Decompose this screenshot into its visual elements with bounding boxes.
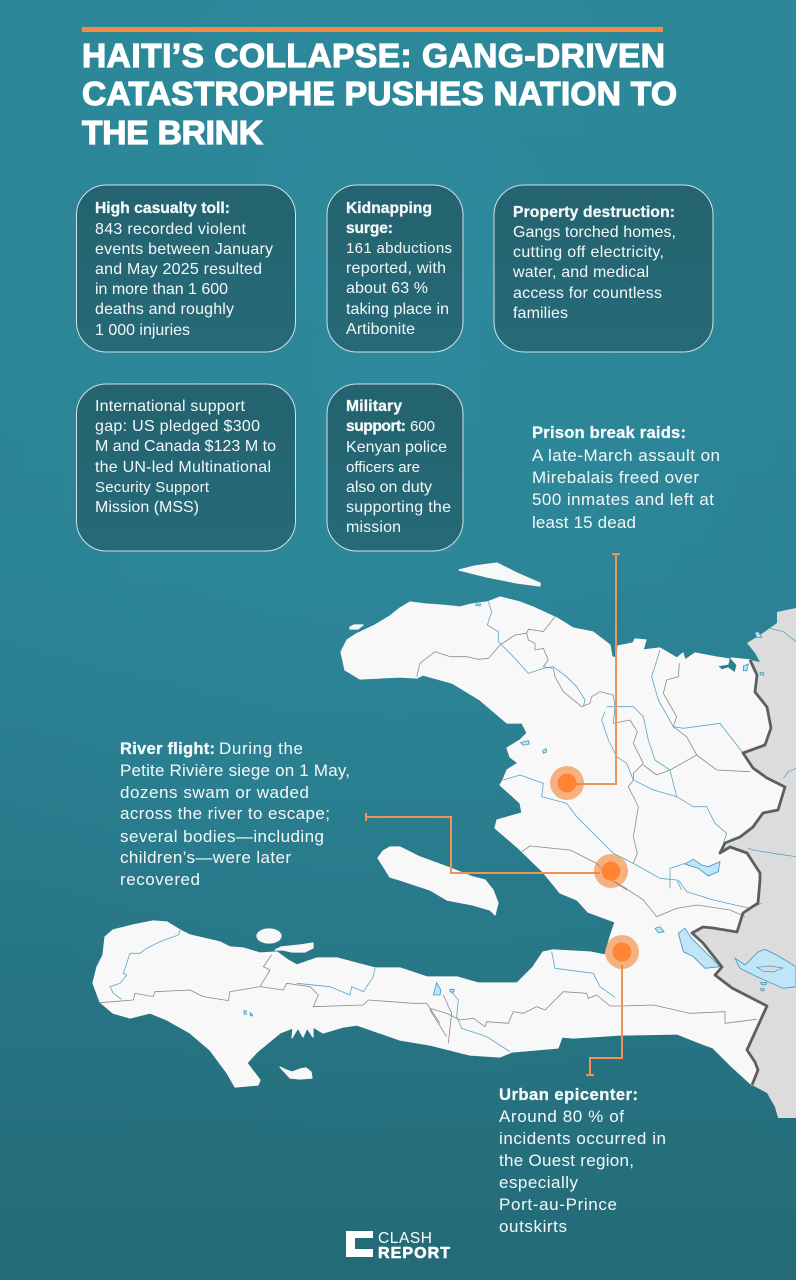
land: Haiti mainland bbox=[93, 597, 785, 1087]
callout: prison break raids: Mirebalais freed over bbox=[532, 468, 699, 487]
callout: urban epicenter: Port-au-Prince bbox=[499, 1195, 617, 1214]
panel: kidnapping surge: surge: bbox=[346, 220, 393, 237]
panel: high casualty toll: deaths and roughly bbox=[95, 301, 234, 318]
callout: river flight: Petite Rivière siege on 1 May, bbox=[120, 761, 350, 780]
panel: high casualty toll bbox=[76, 185, 296, 352]
panel: high casualty toll: in more than 1 600 bbox=[95, 281, 228, 298]
panel: kidnapping surge: reported, with bbox=[346, 260, 446, 277]
callout: river flight: recovered bbox=[120, 870, 200, 889]
panel: military support: also on duty bbox=[346, 479, 432, 496]
leader line: urban epicenter bbox=[586, 965, 622, 1075]
panel: high casualty toll: and May 2025 resulted bbox=[95, 261, 262, 278]
callout: river flight: dozens swam or waded bbox=[120, 783, 309, 802]
logo: Clash Report: CLASH bbox=[378, 1230, 432, 1247]
panel: international support gap: M and Canada $123 M to bbox=[95, 438, 276, 455]
logo: Clash Report bbox=[346, 1230, 450, 1262]
callout: river flight: children’s—were later bbox=[120, 848, 291, 867]
panel: kidnapping surge: about 63 % bbox=[346, 280, 428, 297]
land: Dominican Republic bbox=[692, 608, 796, 1118]
callout: prison break raids: 500 inmates and left at bbox=[532, 490, 714, 509]
panel: kidnapping surge: Kidnapping bbox=[346, 200, 432, 217]
rivers and departments: south-west bbox=[100, 930, 440, 1023]
panel: kidnapping surge: 161 abductions bbox=[346, 240, 452, 257]
callout: urban epicenter: Around 80 % of bbox=[499, 1107, 624, 1126]
panel: property destruction: families bbox=[513, 305, 568, 322]
panel: property destruction: Gangs torched homes, bbox=[513, 224, 676, 241]
marker: Port-au-Prince bbox=[605, 935, 639, 969]
panel: kidnapping surge: taking place in bbox=[346, 301, 449, 318]
panel: kidnapping surge bbox=[327, 185, 463, 352]
panel: military support: mission bbox=[346, 519, 401, 536]
callout: urban epicenter: Urban epicenter: bbox=[499, 1085, 638, 1104]
land: Cayemites bbox=[275, 943, 313, 952]
land: Île-à-Vache bbox=[280, 1067, 312, 1079]
callout: prison break raids: least 15 dead bbox=[532, 513, 636, 532]
title: THE BRINK bbox=[82, 115, 263, 152]
map: Haiti and neighbouring land bbox=[93, 563, 796, 1118]
callout: prison break raids: Prison break raids: bbox=[532, 423, 686, 442]
panel: high casualty toll: 1 000 injuries bbox=[95, 322, 190, 339]
callout: river flight: River flight: bbox=[120, 739, 215, 758]
panel: property destruction: access for countless bbox=[513, 285, 662, 302]
national border bbox=[692, 660, 785, 1085]
title accent bar bbox=[82, 27, 663, 32]
panel: high casualty toll: 843 recorded violent bbox=[95, 221, 247, 238]
panel: military support bbox=[327, 384, 463, 551]
panel: property destruction: cutting off electricity, bbox=[513, 244, 664, 261]
callout: urban epicenter: the Ouest region, bbox=[499, 1151, 634, 1170]
callout: urban epicenter: incidents occurred in bbox=[499, 1129, 666, 1148]
panel: international support gap: gap: US pledged $300 bbox=[95, 418, 260, 435]
callout: prison break raids bbox=[532, 423, 720, 532]
panel: military support: support: bbox=[346, 418, 406, 435]
panel: property destruction bbox=[494, 185, 713, 352]
panel: kidnapping surge: Artibonite bbox=[346, 321, 415, 338]
panel: international support gap: International support bbox=[95, 398, 246, 415]
title: CATASTROPHE PUSHES NATION TO bbox=[82, 76, 677, 113]
land: Grosse Caye bbox=[257, 929, 281, 943]
leader line: prison break raids bbox=[575, 554, 620, 784]
panel: property destruction: Property destruction: bbox=[513, 204, 675, 221]
marker: Petite Rivière bbox=[594, 854, 628, 888]
callout: urban epicenter bbox=[499, 1085, 666, 1236]
rivers, departments and lakes: south-east bbox=[430, 880, 796, 1052]
panel: international support gap bbox=[76, 384, 296, 551]
rivers and departments: north bbox=[417, 602, 796, 890]
callout: urban epicenter: outskirts bbox=[499, 1217, 567, 1236]
land: Tortuga island bbox=[459, 563, 540, 586]
marker: Mirebalais bbox=[550, 766, 584, 800]
panel: military support: Military bbox=[346, 398, 402, 415]
callout: river flight bbox=[120, 739, 350, 889]
land: Gonâve island bbox=[378, 847, 498, 915]
panel: high casualty toll: High casualty toll: bbox=[95, 200, 230, 217]
panel: military support: 600 bbox=[410, 418, 435, 435]
panel: military support: supporting the bbox=[346, 499, 451, 516]
callout: prison break raids: A late-March assault on bbox=[532, 446, 720, 465]
land: small western islet bbox=[350, 625, 363, 629]
panel: property destruction: water, and medical bbox=[512, 264, 649, 281]
panel: high casualty toll: events between January bbox=[95, 241, 273, 258]
callout: river flight: several bodies—including bbox=[120, 827, 324, 846]
title bbox=[82, 38, 677, 152]
panel: military support: officers are bbox=[346, 459, 420, 476]
panel: international support gap: the UN-led Multinational bbox=[95, 459, 271, 476]
callout: river flight: across the river to escape; bbox=[120, 804, 330, 823]
callout: river flight: During the bbox=[219, 739, 303, 758]
title: HAITI’S COLLAPSE: GANG-DRIVEN bbox=[82, 38, 665, 75]
panel: international support gap: Mission (MSS) bbox=[95, 499, 199, 516]
logo: Clash Report: REPORT bbox=[378, 1245, 450, 1262]
callout: urban epicenter: especially bbox=[499, 1173, 578, 1192]
panel: military support: Kenyan police bbox=[346, 439, 447, 456]
leader line: river flight bbox=[366, 813, 600, 873]
panel: international support gap: Security Support bbox=[95, 479, 210, 496]
